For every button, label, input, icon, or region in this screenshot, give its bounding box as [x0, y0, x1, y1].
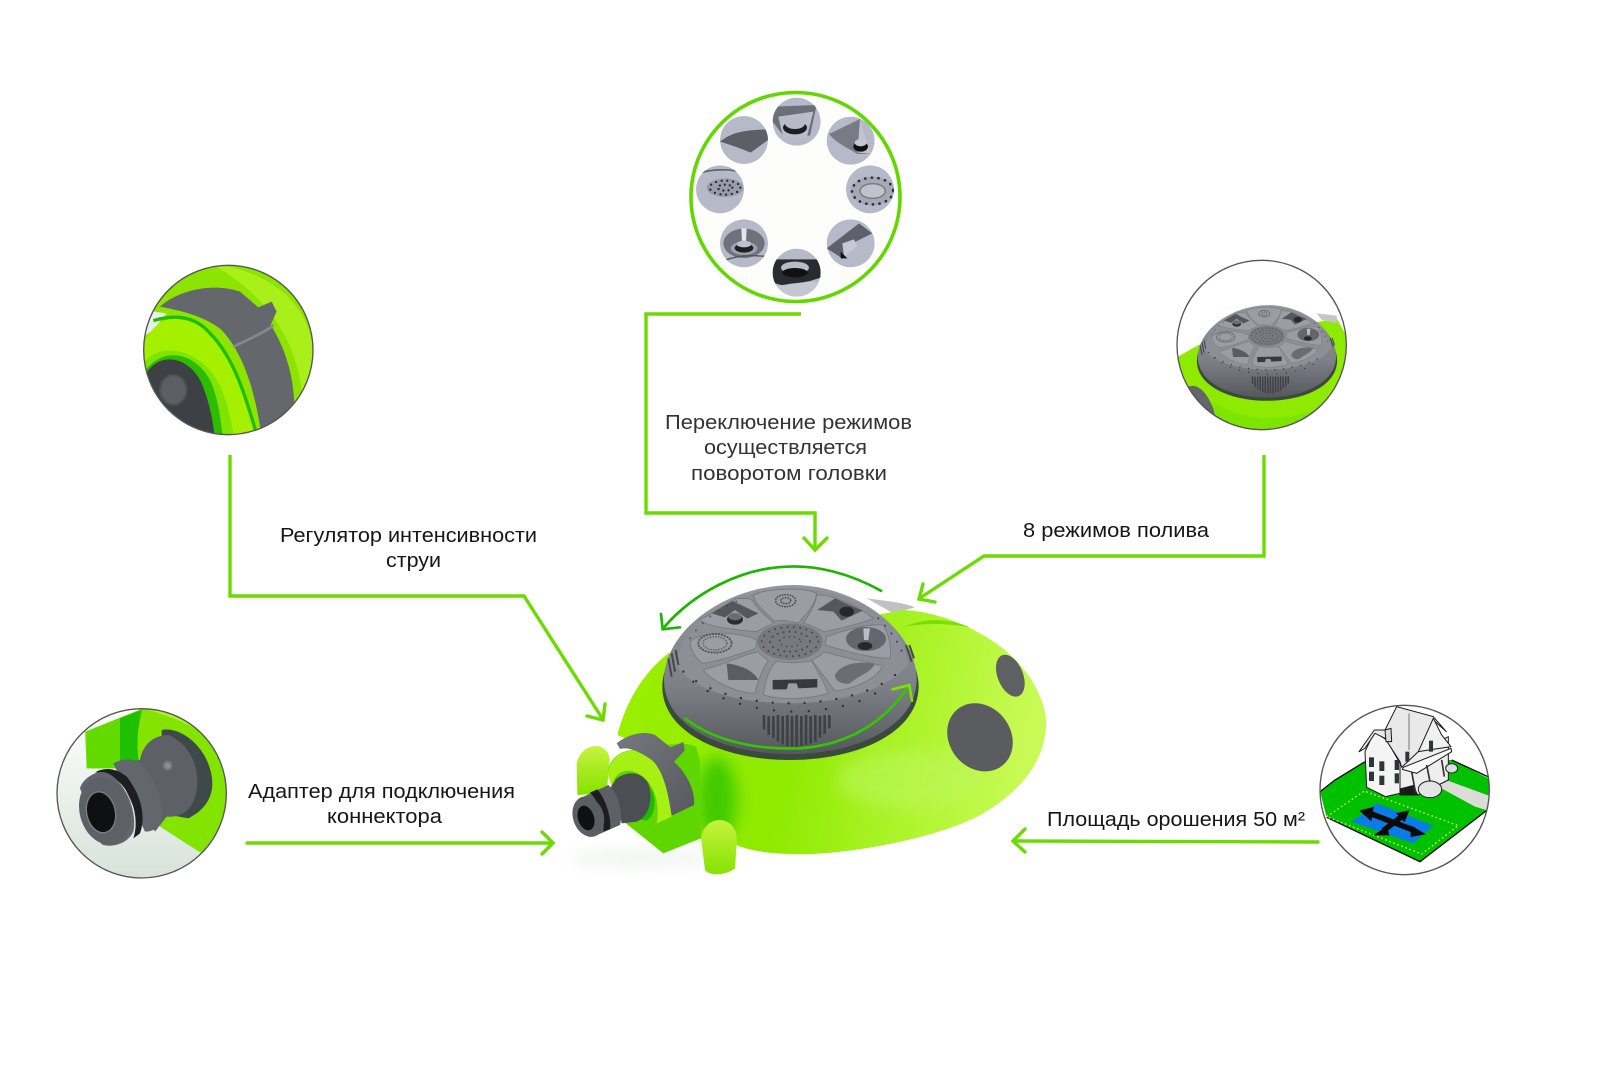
dome body [617, 610, 1046, 854]
windows [1369, 741, 1433, 785]
label: mode switching: Переключение режимов [665, 411, 912, 434]
gray sliver behind head [867, 598, 915, 613]
spots [934, 651, 1030, 785]
label: mode switching: поворотом головки [691, 462, 887, 485]
house [1359, 707, 1452, 797]
nozzle photo lower left [720, 219, 768, 267]
arrow: adapter [247, 832, 553, 854]
label: intensity regulator: струи [386, 549, 441, 572]
label: irrigation area: Площадь орошения 50 м² [1047, 808, 1305, 831]
detail circle: irrigation area [1318, 703, 1492, 880]
detail circle: 8 spray modes [691, 92, 900, 302]
cross arrows [1360, 807, 1425, 837]
nozzle photo top [773, 98, 821, 146]
arrow: irrigation area [1013, 829, 1318, 852]
nozzle photo left [696, 165, 744, 213]
arrow: 8 modes [919, 455, 1264, 602]
shrubs [1400, 760, 1458, 798]
nozzle photo bottom [773, 249, 821, 297]
nozzle photo lower right [827, 219, 875, 267]
arrow: intensity regulator [230, 455, 605, 720]
label: adapter: Адаптер для подключения [248, 780, 515, 803]
hose adapter [567, 773, 651, 841]
detail circle: hose adapter [55, 705, 232, 882]
label: intensity regulator: Регулятор интенсивности [280, 524, 537, 547]
front peg left [577, 746, 610, 795]
label: 8 modes: 8 режимов полива [1023, 519, 1210, 542]
label: mode switching: осуществляется [704, 436, 867, 459]
product: ladybug sprinkler [567, 566, 1046, 874]
detail circle: intensity regulator [140, 260, 317, 440]
nozzle photo upper left [720, 116, 768, 164]
adapter flare [162, 730, 212, 818]
front peg right [701, 820, 737, 874]
arrow: mode switching [646, 314, 827, 550]
label: adapter: коннектора [327, 805, 443, 828]
adjuster nut [617, 733, 694, 816]
lawn [1320, 760, 1492, 862]
nozzle photo upper right [827, 117, 875, 165]
arrow: rotation over head [661, 566, 882, 629]
nozzle photo right [846, 165, 894, 213]
ground shadow [567, 850, 713, 867]
detail circle: 8 modes head [1175, 258, 1352, 435]
connector block [608, 744, 701, 853]
arrow: rotation across head [685, 685, 912, 749]
rotating head [662, 585, 919, 760]
